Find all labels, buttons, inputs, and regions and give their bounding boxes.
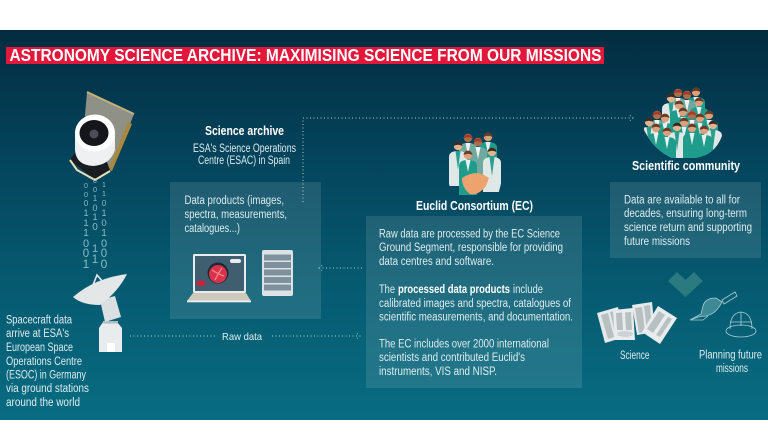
binary data stream: 1 <box>102 189 106 198</box>
binary data stream: 0 <box>84 183 88 190</box>
text: spacecraft data: arrive at ESA's <box>6 328 69 340</box>
binary data stream: 0 <box>84 190 88 199</box>
binary data stream: 1 <box>83 208 89 218</box>
paragraph: raw data <box>379 228 563 268</box>
panel text <box>184 195 287 235</box>
text: spacecraft data: around the world <box>6 397 80 409</box>
binary data stream: 1 <box>83 257 90 271</box>
icon: laptop <box>187 254 251 302</box>
title: ASTRONOMY SCIENCE ARCHIVE: MAXIMISING SCIENCE FROM OUR MISSIONS <box>10 45 602 65</box>
binary data stream: 1 <box>93 194 98 203</box>
binary data stream: 0 <box>84 199 89 208</box>
binary data stream: 0 <box>102 199 107 208</box>
panel: scientific community description: future missions <box>624 236 690 248</box>
binary data stream: 1 <box>101 228 107 239</box>
binary data stream: 0 <box>92 222 98 233</box>
icon: Euclid consortium group <box>449 133 501 195</box>
arrow: raw data to consortium <box>272 334 360 338</box>
binary data stream: 1 <box>102 182 106 189</box>
text: spacecraft data: Spacecraft data <box>6 314 72 326</box>
panel: scientific community description: Data are available to all for <box>624 194 740 206</box>
binary data stream: 1 <box>101 208 107 218</box>
binary data stream <box>83 178 108 271</box>
binary data stream: 0 <box>93 185 97 194</box>
binary data stream: 0 <box>101 218 107 229</box>
binary data stream: 0 <box>93 178 97 185</box>
binary data stream: 0 <box>101 248 107 260</box>
paragraph: raw data: data centres and software. <box>379 256 494 268</box>
binary data stream: 0 <box>101 257 108 271</box>
paragraph: processed data: include <box>513 284 543 296</box>
paragraph: processed data: calibrated images and spectra, catalogues of <box>379 298 572 310</box>
label: planning future missions: missions <box>716 363 748 375</box>
text: spacecraft data: (ESOC) in Germany <box>6 370 86 382</box>
panel text: spectra, measurements, <box>184 209 287 221</box>
binary data stream: 0 <box>83 238 89 250</box>
text: spacecraft data: European Space <box>6 342 73 354</box>
icon: server <box>262 250 293 296</box>
paragraph: raw data: Raw data are processed by the EC Science <box>379 228 560 240</box>
text: spacecraft data: Operations Centre <box>6 356 82 368</box>
paragraph: EC membership: The EC includes over 2000 international <box>379 338 549 350</box>
binary data stream: 1 <box>92 212 98 223</box>
panel: consortium description <box>366 216 582 388</box>
paragraph: processed data: processed data products <box>398 284 510 296</box>
binary data stream: 0 <box>83 248 89 260</box>
icon: science papers <box>597 302 677 344</box>
label: raw data: Raw data <box>222 331 262 343</box>
binary data stream: 1 <box>92 254 98 266</box>
heading: science archive: Science archive <box>205 124 284 138</box>
heading: Euclid Consortium: Euclid Consortium (EC) <box>416 199 533 213</box>
paragraph: processed data <box>379 284 573 324</box>
text: spacecraft data: via ground stations <box>6 383 89 395</box>
binary data stream: 1 <box>83 218 89 229</box>
icon: Euclid spacecraft <box>70 92 134 180</box>
panel: data products <box>170 182 321 319</box>
panel: scientific community description: decades, ensuring long-term <box>624 208 747 220</box>
label: science: Science <box>620 350 650 362</box>
binary data stream: 0 <box>101 238 107 250</box>
arrow: raw data from ground station <box>130 335 215 337</box>
panel text: catalogues...) <box>184 223 240 235</box>
heading: science archive <box>193 124 296 167</box>
heading: science archive: ESA's Science Operations <box>193 143 296 155</box>
icon: future mission probes <box>690 292 756 337</box>
paragraph: processed data: The <box>379 284 395 296</box>
arrow: archive to scientific community <box>303 116 633 202</box>
heading: science archive: Centre (ESAC) in Spain <box>198 155 290 167</box>
icon: scientific community group <box>644 88 722 158</box>
icon: ground station dish <box>73 274 127 352</box>
paragraph: EC membership <box>379 338 549 378</box>
binary data stream: 0 <box>92 203 98 213</box>
icon: chevron <box>668 272 703 297</box>
binary data stream: 1 <box>92 243 98 255</box>
binary data stream: 1 <box>83 228 89 239</box>
panel: scientific community description <box>610 182 761 258</box>
text: spacecraft data <box>6 314 89 409</box>
label: planning future missions <box>699 350 762 375</box>
arrow: consortium to archive <box>319 266 362 270</box>
paragraph: EC membership: instruments, VIS and NISP. <box>379 366 497 378</box>
panel text: Data products (images, <box>184 195 284 207</box>
paragraph: raw data: Ground Segment, responsible for providing <box>379 242 563 254</box>
paragraph: processed data: scientific measurements, and documentation. <box>379 312 573 324</box>
paragraph: EC membership: scientists and contributed Euclid's <box>379 352 525 364</box>
heading: scientific community: Scientific community <box>632 159 740 173</box>
